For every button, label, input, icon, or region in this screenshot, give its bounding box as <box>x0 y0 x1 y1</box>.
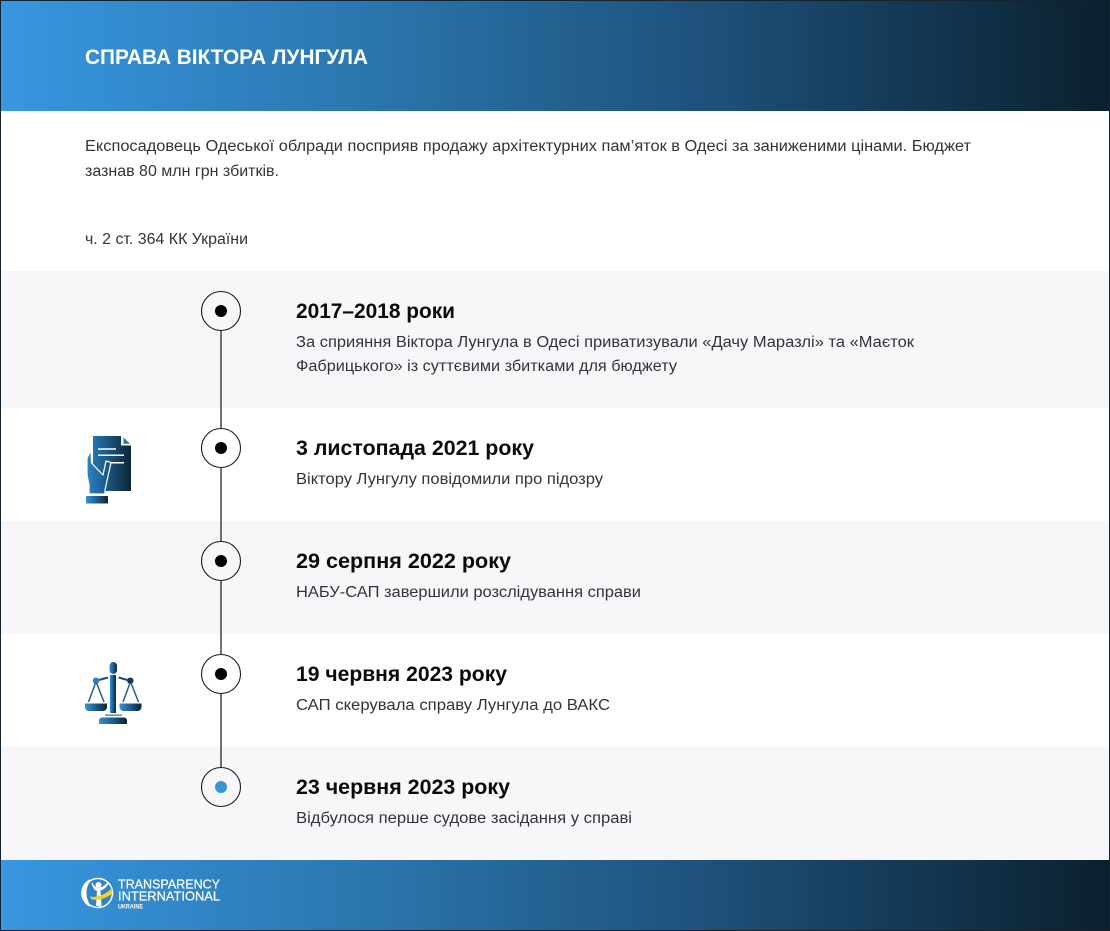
timeline event 1: 2017–2018 роки <box>296 300 455 323</box>
timeline event 5: Відбулося перше судове засідання у справі <box>296 810 632 827</box>
timeline event 5: 23 червня 2023 року <box>296 776 510 799</box>
icon: hand holding document <box>86 436 131 504</box>
timeline event 3: 29 серпня 2022 року <box>296 550 511 573</box>
logo: Transparency International Ukraine: UKRAINE <box>118 904 143 910</box>
logo: Transparency International Ukraine: INTERNATIONAL <box>118 890 220 904</box>
logo: Transparency International Ukraine: TRANSPARENCY <box>118 878 221 892</box>
timeline event 1 <box>202 292 914 375</box>
timeline event 2 <box>202 428 603 488</box>
title: СПРАВА ВІКТОРА ЛУНГУЛА <box>85 46 368 69</box>
marker 4 <box>202 654 240 694</box>
timeline event 2: 3 листопада 2021 року <box>296 437 534 460</box>
timeline event 4: САП скерувала справу Лунгула до ВАКС <box>296 697 610 714</box>
intro text: зазнав 80 млн грн збитків. <box>85 163 279 180</box>
header band <box>0 0 1110 111</box>
logo emblem <box>82 878 112 908</box>
logo: Transparency International Ukraine <box>82 878 221 910</box>
timeline event 3 <box>202 542 641 601</box>
marker 5 <box>202 768 240 806</box>
timeline event 4: 19 червня 2023 року <box>296 663 507 686</box>
marker 3 <box>202 542 240 580</box>
timeline event 4 <box>202 654 610 714</box>
icon: scales of justice <box>85 662 142 724</box>
timeline event 2: Віктору Лунгулу повідомили про підозру <box>296 471 603 488</box>
footer band <box>0 860 1110 931</box>
legal article: ч. 2 ст. 364 КК України <box>85 231 248 248</box>
timeline event 5 <box>202 768 632 827</box>
timeline axis <box>220 311 222 787</box>
intro text: Експосадовець Одеської облради посприяв продажу архітектурних пам’яток в Одесі за заниженими цінами. Бюджет <box>85 138 971 155</box>
marker 1 <box>202 292 240 330</box>
timeline event 1: За сприяння Віктора Лунгула в Одесі приватизували «Дачу Маразлі» та «Маєток <box>296 334 914 351</box>
timeline row backgrounds <box>0 271 1110 860</box>
intro text <box>85 138 971 180</box>
marker 2 <box>202 428 240 468</box>
timeline event 3: НАБУ-САП завершили розслідування справи <box>296 584 641 601</box>
timeline event 1: Фабрицького» із суттєвими збитками для бюджету <box>296 358 677 375</box>
